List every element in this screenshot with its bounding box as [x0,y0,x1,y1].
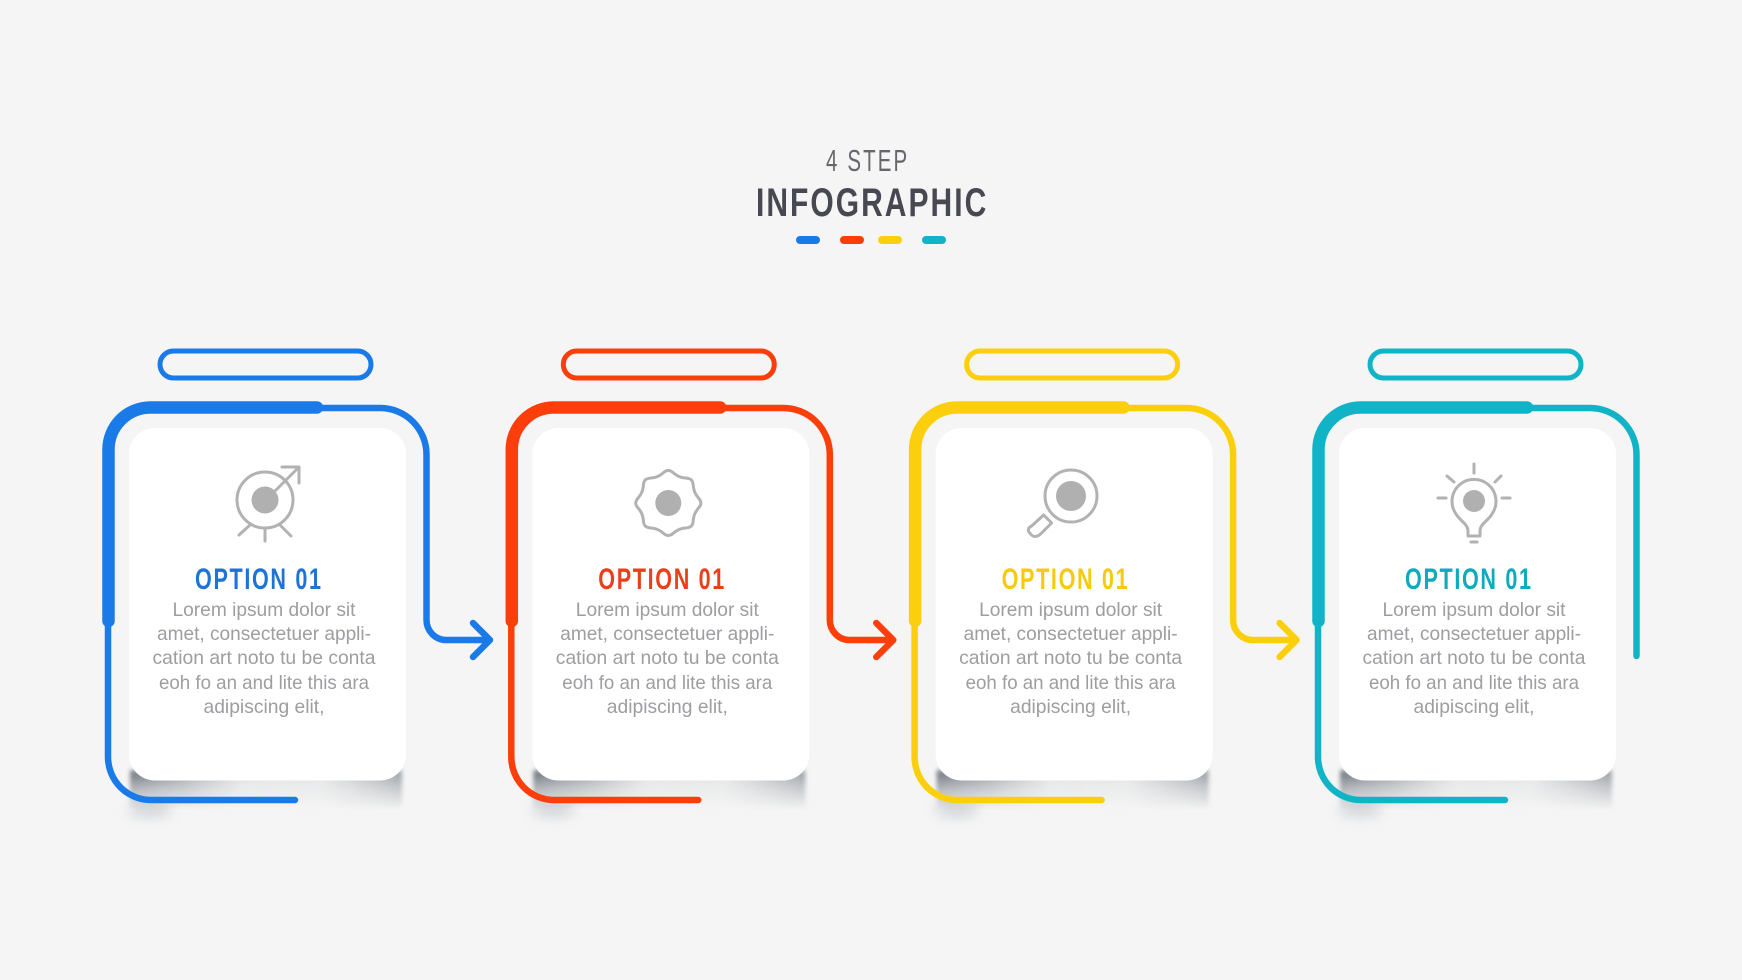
card shadow [531,770,805,817]
icon: target arrow [237,467,299,541]
pill outline [1370,351,1581,378]
white card [129,428,406,780]
body text [556,599,779,718]
white card [1339,428,1616,780]
body text: eoh fo an and lite this ara [966,672,1176,694]
panel: step 4 teal [1318,351,1636,817]
body text: eoh fo an and lite this ara [159,672,369,694]
option heading: OPTION 01 [598,561,724,596]
card shadow [128,770,402,817]
option heading: OPTION 01 [195,561,321,596]
pill outline [967,351,1178,378]
body text: eoh fo an and lite this ara [1369,672,1579,694]
body text [959,599,1182,718]
thick frame accent [108,408,317,621]
body text: Lorem ipsum dolor sit [979,599,1163,621]
option heading: OPTION 01 [1405,561,1531,596]
white card [532,428,809,780]
panel: step 1 blue [108,351,490,817]
body text: adipiscing elit, [1010,696,1131,718]
body text [1362,599,1586,718]
body text: Lorem ipsum dolor sit [576,599,759,621]
thin frame and arrow [511,408,893,800]
body text: adipiscing elit, [1414,696,1534,718]
thick frame accent [1318,408,1527,621]
card shadow [1338,770,1612,817]
thick frame accent [512,408,720,621]
body text: amet, consectetuer appli- [1367,623,1581,645]
body text: amet, consectetuer appli- [157,623,371,645]
subtitle: 4 step: 4 STEP [826,143,907,178]
thin frame and arrow [915,408,1297,800]
icon: magnifier [1028,470,1097,536]
body text: adipiscing elit, [204,696,324,718]
body text: Lorem ipsum dolor sit [172,599,356,621]
body text [152,599,376,718]
body text: amet, consectetuer appli- [560,623,774,645]
panel: step 2 red [511,351,893,817]
icon: gear badge [632,466,705,540]
body text: amet, consectetuer appli- [964,623,1178,645]
thin frame [1318,408,1636,800]
option heading: OPTION 01 [1002,561,1128,596]
white card [936,428,1213,780]
icon: light bulb [1438,464,1510,542]
body text: cation art noto tu be conta [959,647,1182,669]
thin frame and arrow [108,408,490,800]
body text: cation art noto tu be conta [556,647,779,669]
body text: cation art noto tu be conta [152,647,376,669]
body text: Lorem ipsum dolor sit [1382,599,1566,621]
card shadow [935,770,1209,817]
pill outline [563,351,774,378]
title [756,143,986,244]
panel: step 3 yellow [915,351,1297,817]
thick frame accent [915,408,1124,621]
pill outline [160,351,371,378]
body text: adipiscing elit, [607,696,728,718]
heading: infographic: INFOGRAPHIC [756,181,986,225]
body text: eoh fo an and lite this ara [562,672,772,694]
body text: cation art noto tu be conta [1362,647,1586,669]
colour dashes [796,236,946,244]
